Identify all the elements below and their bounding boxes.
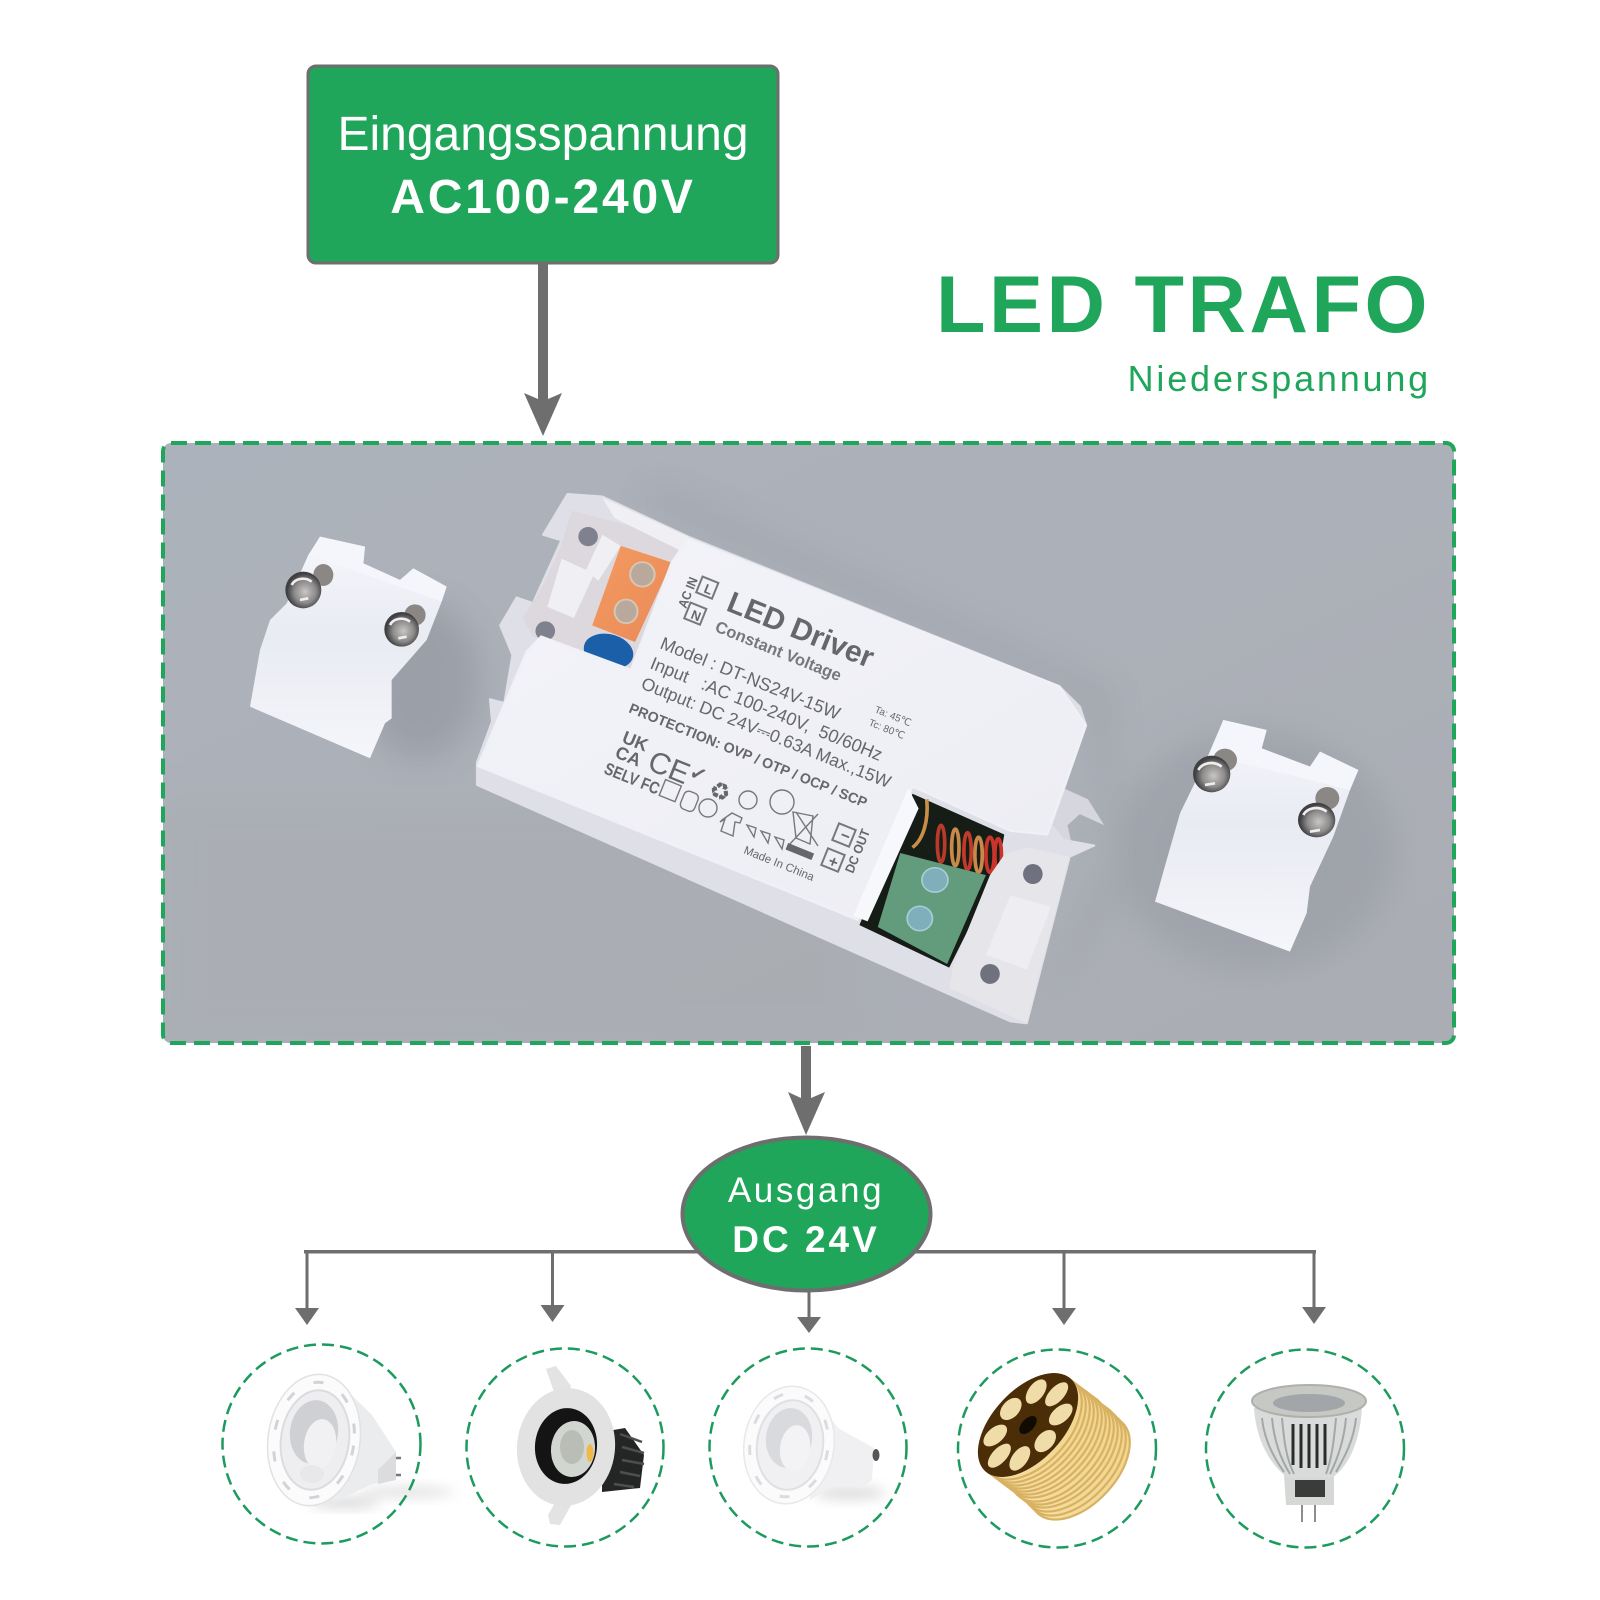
input terminal screws (615, 562, 655, 623)
driver certification icons (659, 577, 856, 872)
output ellipse: Ausgang (728, 1171, 884, 1210)
output ellipse: DC 24V (732, 1219, 880, 1260)
product: MR11 glass bulb (1252, 1385, 1366, 1522)
driver label text: DC OUT (842, 827, 873, 875)
dashed ring 3 (710, 1348, 906, 1546)
polarity and terminal glyphs: N (689, 607, 703, 624)
driver label text: Output: DC 24V⎓0.63A Max.,15W (639, 673, 894, 792)
driver label text: Made In China (742, 845, 816, 884)
output coil (912, 799, 1001, 873)
polarity and terminal glyphs: − (838, 827, 853, 846)
driver label text: SELV FC (602, 759, 662, 798)
driver label text: Model : DT-NS24V-15W (658, 633, 843, 724)
blue capacitor (579, 628, 638, 675)
left cavity (523, 511, 684, 670)
orange input terminal (592, 546, 672, 642)
mounting ear (1047, 784, 1104, 844)
polarity and terminal glyphs: L (702, 581, 715, 598)
driver label text: ♻ (705, 776, 735, 809)
lid ridge at right opening (853, 788, 919, 921)
output terminal screws (907, 868, 948, 931)
driver label text: CE (643, 745, 694, 791)
panel: product photo (163, 443, 1454, 1043)
output distribution lines and arrows (295, 1250, 1326, 1333)
input voltage box: Eingangsspannung (337, 108, 749, 161)
driver label text: LED Driver (722, 586, 879, 675)
driver label text: PROTECTION: OVP / OTP / OCP / SCP (627, 701, 869, 811)
infographic canvas (161, 64, 1456, 1549)
product: recessed downlight (511, 1366, 644, 1525)
driver label text (602, 575, 913, 884)
green output terminal (878, 853, 986, 964)
right end cap clip (1155, 720, 1358, 952)
dashed ring 2 (466, 1348, 664, 1546)
LED driver housing (477, 494, 1104, 1023)
cavity holes (535, 527, 598, 641)
title block: LED TRAFO (936, 260, 1431, 350)
dashed ring 4 (958, 1350, 1156, 1548)
polarity and terminal glyphs (689, 581, 853, 872)
polarity and terminal glyphs: + (826, 853, 841, 872)
driver label text: Ta: 45℃ (873, 705, 913, 729)
dashed ring 5 (1206, 1350, 1404, 1548)
input voltage box (308, 66, 778, 263)
driver label text: Tc: 80℃ (867, 718, 906, 742)
driver label text: UK (620, 727, 651, 755)
right cavity dark (859, 794, 1004, 968)
arrow: input to driver (524, 263, 562, 436)
title block (936, 260, 1431, 399)
product: GU10 bulb (736, 1380, 886, 1510)
arrow: driver to output (788, 1046, 825, 1135)
input voltage box: AC100-240V (390, 171, 696, 224)
cavity posts (547, 498, 688, 618)
product: MR16 bulb (259, 1368, 455, 1512)
title block: Niederspannung (1128, 358, 1431, 399)
driver label text: CA (613, 742, 644, 770)
output ellipse (682, 1138, 930, 1290)
driver label text: Input :AC 100-240V, 50/60Hz (648, 653, 885, 765)
left end cap clip (250, 537, 447, 758)
lid top surface (478, 538, 1086, 920)
driver label text: Constant Voltage (713, 618, 844, 685)
dashed ring 1 (222, 1344, 420, 1544)
driver label text: AC IN (675, 575, 701, 610)
right end shell (949, 847, 1070, 1023)
driver label text: ✓ (686, 761, 710, 788)
right end holes (980, 864, 1043, 984)
housing silhouette (477, 494, 1094, 1023)
panel dashed border (163, 443, 1454, 1043)
product: LED strip reel (959, 1355, 1149, 1538)
